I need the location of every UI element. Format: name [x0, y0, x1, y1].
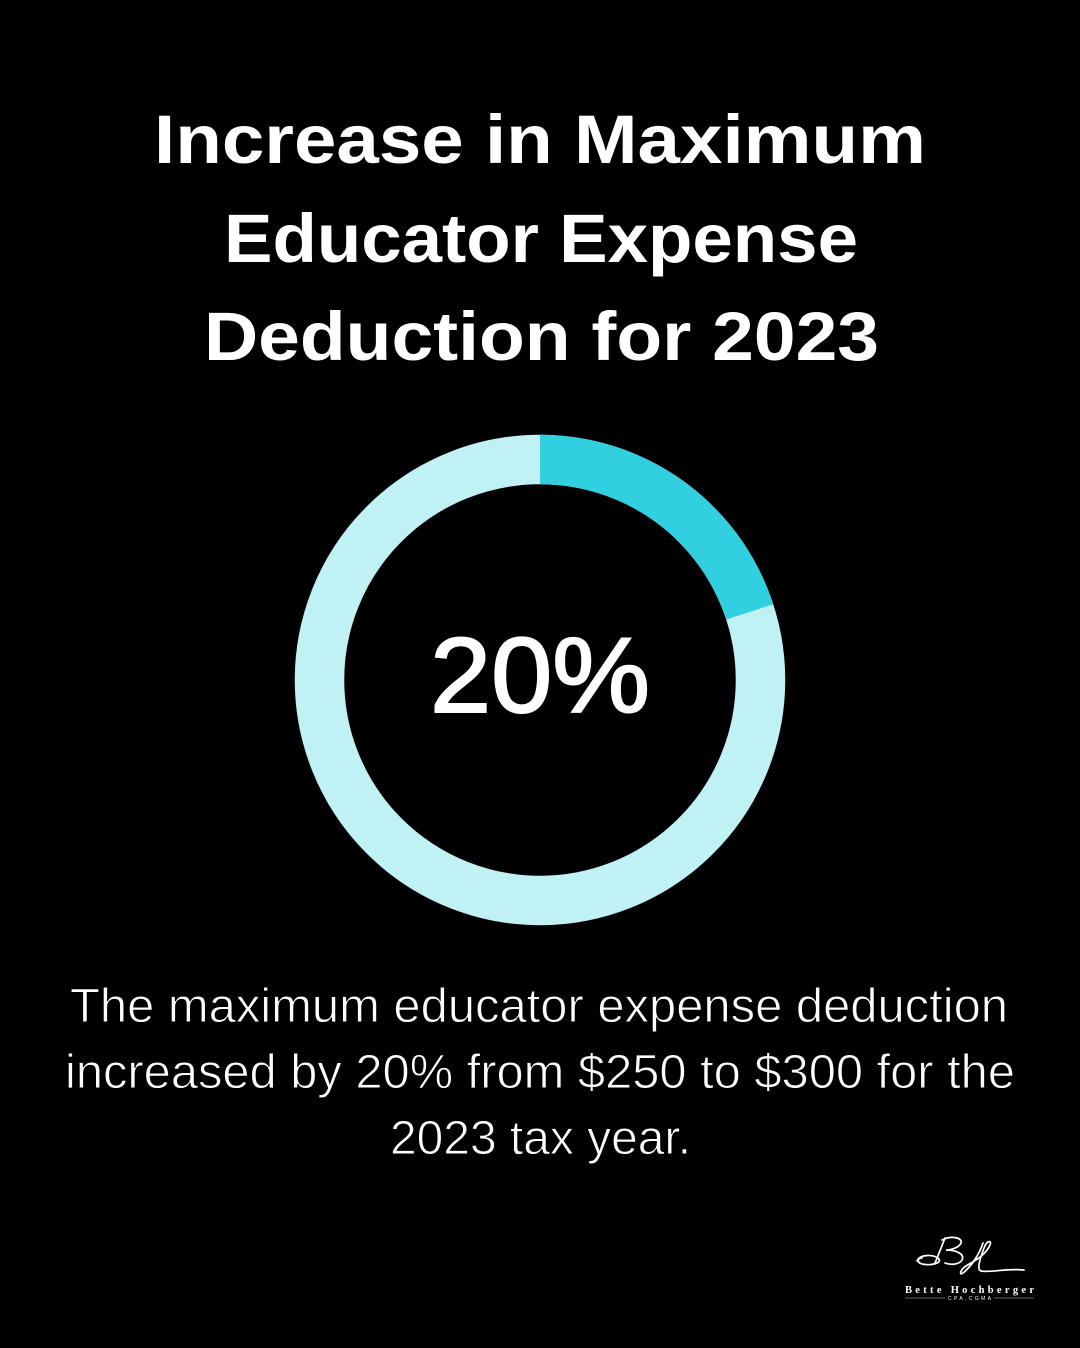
- title: Increase in Maximum: [154, 101, 926, 178]
- description text: 2023 tax year.: [390, 1112, 691, 1165]
- title: Deduction for 2023: [204, 298, 879, 375]
- title: Educator Expense: [224, 200, 858, 277]
- donut chart: 20%: [320, 460, 760, 900]
- description text: increased by 20% from $250 to $300 for the: [65, 1046, 1015, 1099]
- donut centre value: 20%: [430, 615, 650, 735]
- logo: Bette Hochberger signature: [905, 1237, 1034, 1302]
- description text: [65, 980, 1015, 1165]
- title: [154, 101, 926, 375]
- description text: The maximum educator expense deduction: [70, 980, 1008, 1033]
- logo credentials: CPA,CGMA: [948, 1296, 992, 1302]
- icon: BH signature: [917, 1237, 1024, 1274]
- logo name: Bette Hochberger: [905, 1285, 1034, 1296]
